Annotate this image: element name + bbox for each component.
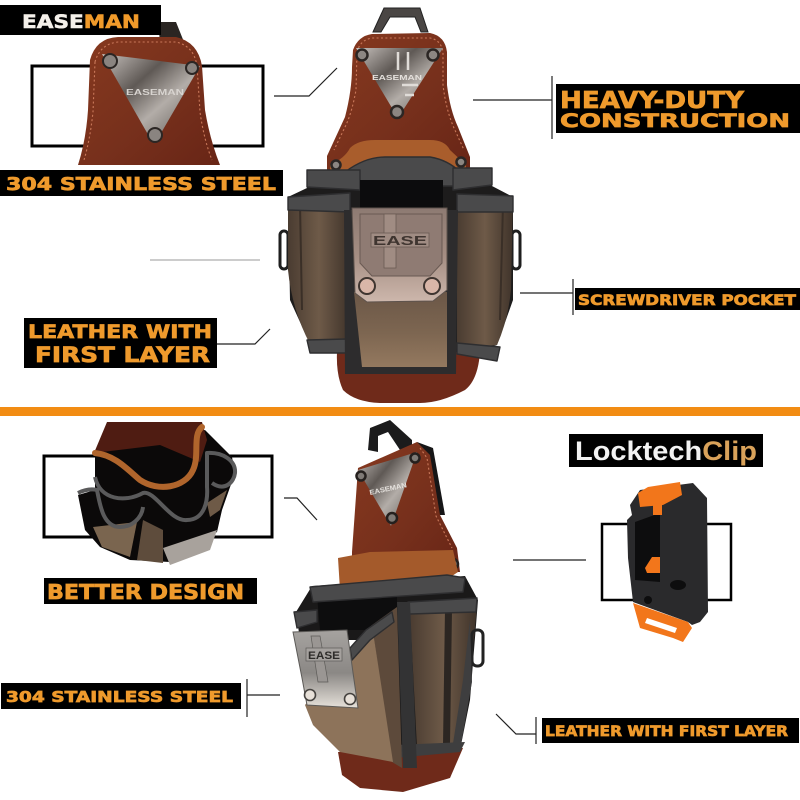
callout line: lower 304 steel — [247, 679, 280, 717]
detail stitching — [84, 42, 212, 160]
right pocket — [457, 197, 513, 348]
angled embossed cross — [311, 636, 328, 682]
orange suede rim — [95, 427, 202, 487]
label: lower 304 stainless steel — [1, 683, 241, 709]
bottom webbing — [395, 742, 465, 758]
panel: LocktechClip detail — [602, 482, 731, 642]
right pocket seam — [500, 205, 503, 320]
angled bottom leather — [338, 748, 463, 792]
right rear binding — [453, 168, 492, 190]
callout line: left pocket — [150, 259, 260, 261]
angled black cup — [317, 595, 397, 630]
label: lower leather with first layer: LEATHER WITH FIRST LAYER — [545, 724, 788, 740]
brand banner — [0, 5, 161, 35]
clip body — [627, 483, 708, 625]
heading: heavy-duty construction — [556, 84, 800, 133]
detail steel triangle — [102, 54, 200, 140]
callout line: lower leather — [496, 714, 536, 744]
engraved mark — [398, 52, 418, 95]
callout line: clip — [513, 559, 586, 561]
angled back leather — [352, 442, 460, 572]
callout line: heavy-duty — [473, 76, 552, 139]
left pocket seam — [300, 205, 302, 310]
centre webbing frame — [344, 210, 458, 374]
engraved logo: EASEMAN — [372, 75, 422, 82]
left rear binding — [294, 610, 317, 628]
heading: heavy-duty construction: HEAVY-DUTY — [560, 88, 744, 114]
angled hook — [368, 420, 412, 452]
bottom leather — [337, 352, 480, 403]
label: screwdriver pocket: SCREWDRIVER POCKET — [578, 293, 797, 309]
black inner cup — [360, 180, 443, 210]
left pocket binding — [288, 193, 350, 212]
label: leather with first layer: FIRST LAYER — [35, 343, 210, 367]
detail hook — [158, 22, 184, 42]
divider: orange band — [0, 407, 800, 416]
dark backing — [296, 576, 478, 750]
illustration: angled view of pouch — [293, 420, 483, 792]
angled rivets — [356, 454, 458, 569]
dark backing — [288, 172, 513, 374]
clip frame — [602, 524, 731, 600]
rivets — [332, 50, 466, 170]
angled metal clip — [293, 630, 358, 708]
clip orange tab — [653, 500, 662, 515]
grey rim middle — [95, 453, 235, 520]
angled side pockets — [410, 605, 477, 748]
right pocket binding — [457, 194, 513, 212]
right d-ring — [512, 231, 520, 269]
embossed logo: EASE — [373, 233, 427, 248]
suede trim — [330, 140, 466, 172]
left strap — [307, 339, 347, 353]
tan pocket left — [93, 522, 137, 557]
detail rivets — [103, 54, 198, 142]
angled middle panel — [372, 607, 402, 768]
tan pocket right — [207, 490, 227, 517]
leather back — [94, 422, 207, 462]
angled pocket slit — [443, 610, 452, 745]
angled d-ring — [472, 630, 483, 666]
angled embossed logo: EASE — [308, 650, 340, 662]
stitching — [334, 38, 464, 150]
top webbing — [345, 157, 460, 186]
callout line: leather — [217, 329, 270, 344]
clip inner recess — [635, 513, 660, 582]
label: leather with first layer: LEATHER WITH — [28, 321, 212, 343]
label: lower 304 stainless steel: 304 STAINLESS STEEL — [6, 688, 234, 706]
angled central strap — [397, 602, 417, 768]
embossed panel — [360, 214, 442, 276]
panel: top-left steel plate detail — [32, 22, 263, 165]
hook — [373, 8, 428, 32]
label: lower leather with first layer — [542, 718, 799, 743]
angled front pocket — [305, 625, 393, 762]
right strap — [457, 343, 500, 361]
angled clip holes — [304, 690, 356, 704]
black interior — [78, 430, 235, 562]
angled front binding — [350, 612, 394, 660]
illustration: front view of pouch — [280, 8, 520, 403]
clip orange top — [638, 482, 682, 507]
left rear binding — [307, 170, 360, 190]
callout line: better design — [284, 498, 317, 520]
heading: better design: BETTER DESIGN — [47, 580, 244, 604]
label: leather with first layer — [24, 318, 217, 368]
panel: top-down pocket detail — [44, 422, 272, 565]
grey rim front — [78, 489, 143, 527]
clip orange latch — [645, 557, 660, 573]
angled engraved logo: EASEMAN — [369, 482, 408, 497]
tan pocket middle — [137, 520, 163, 563]
steel triangle — [356, 48, 443, 118]
callout line: steel plate — [274, 68, 337, 96]
left pocket — [288, 193, 350, 344]
angled top webbing — [310, 575, 465, 602]
front metal edge — [163, 530, 217, 565]
rear clip strip — [417, 442, 445, 515]
left d-ring — [280, 231, 288, 269]
pocket frame — [44, 456, 272, 537]
angled suede — [338, 550, 458, 590]
brand banner: EASE MAN — [22, 11, 140, 33]
metal clip plate — [352, 208, 447, 302]
clip slot — [645, 618, 677, 633]
heading: 304 stainless steel — [0, 170, 283, 196]
embossed cross — [384, 214, 396, 268]
clip orange bottom — [633, 603, 692, 642]
centre pocket — [354, 292, 447, 367]
logo: LocktechClip: Locktech Clip — [575, 436, 757, 466]
back leather — [327, 33, 470, 172]
detail engraved logo: EASEMAN — [126, 88, 184, 97]
detail leather — [78, 37, 220, 165]
clip holes — [359, 278, 440, 294]
heading: heavy-duty construction: CONSTRUCTION — [560, 110, 790, 132]
clip holes — [644, 580, 686, 604]
angled steel triangle — [358, 452, 417, 526]
right edge webbing — [452, 620, 472, 750]
angled side binding — [408, 598, 477, 614]
heading: 304 stainless steel: 304 STAINLESS STEEL — [6, 174, 276, 195]
label: screwdriver pocket — [575, 288, 800, 310]
angled stitching — [420, 448, 452, 548]
callout line: screwdriver pocket — [520, 279, 573, 315]
embossed logo — [371, 233, 429, 248]
detail frame — [32, 66, 263, 146]
